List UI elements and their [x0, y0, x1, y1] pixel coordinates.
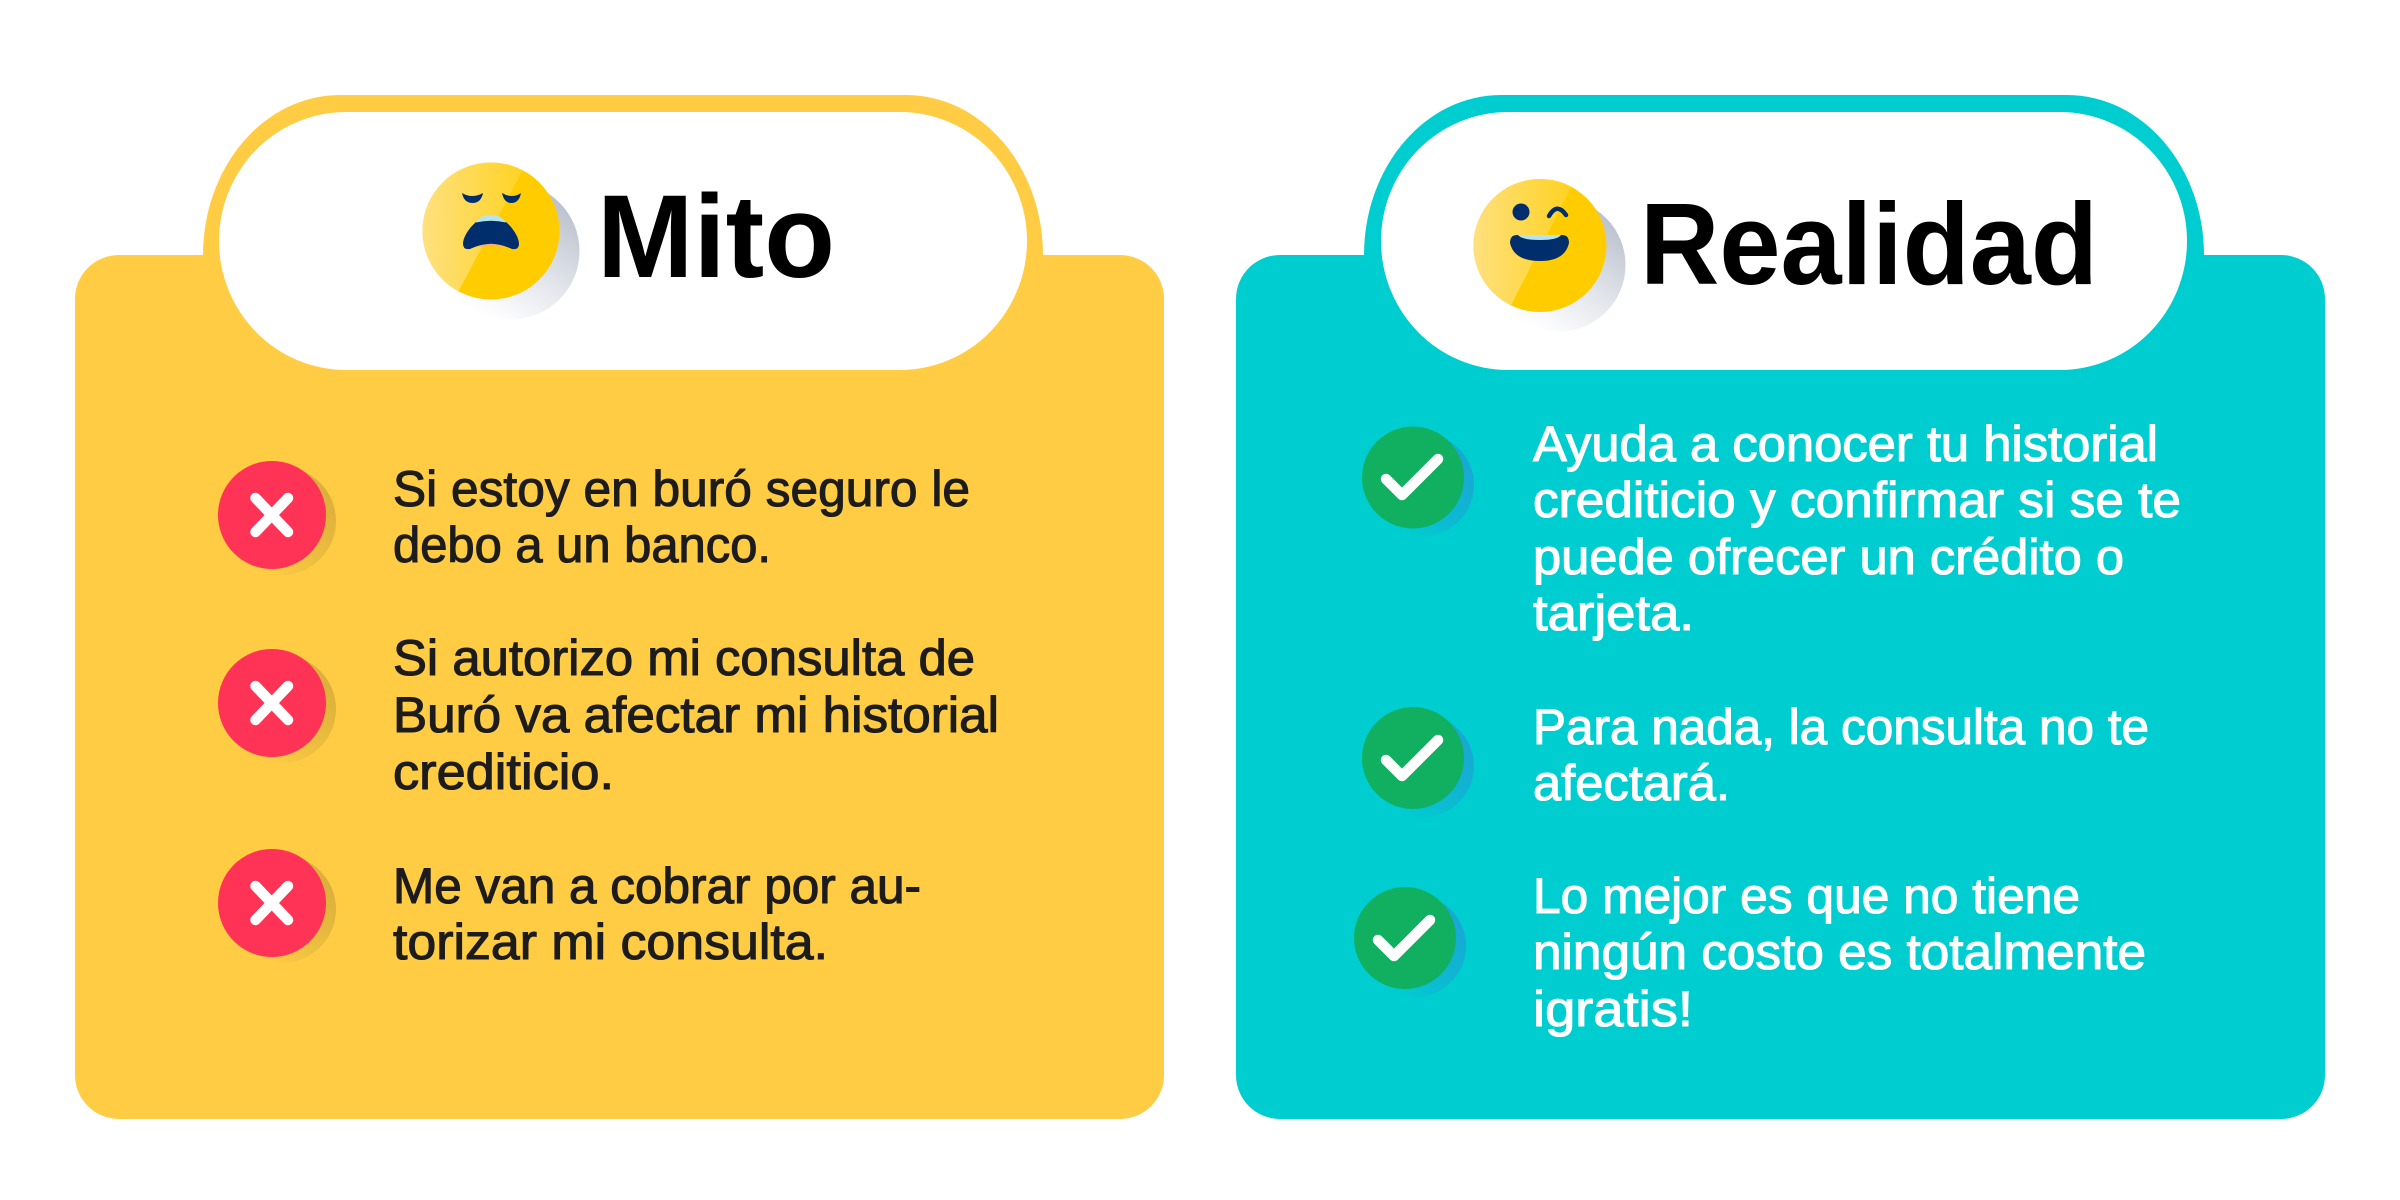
- text: mito 1: debo a un banco.: [393, 517, 771, 573]
- text: realidad 3: [1533, 868, 2146, 1037]
- icon: green check 2: [1362, 707, 1474, 817]
- text: realidad 3: Lo mejor es que no tiene: [1533, 868, 2080, 924]
- text: mito 1: [393, 461, 970, 573]
- heading: Realidad: Realidad: [1640, 179, 2098, 309]
- panel background: Realidad: [1236, 255, 2325, 1119]
- text: mito 3: [393, 858, 921, 970]
- text: realidad 2: afectará.: [1533, 755, 1730, 811]
- text: mito 1: Si estoy en buró seguro le: [393, 461, 970, 517]
- panel: Realidad: [1236, 95, 2325, 1119]
- header tab outline: Mito: [203, 95, 1043, 415]
- text: realidad 2: [1533, 699, 2149, 811]
- text: mito 2: Buró va afectar mi historial: [393, 687, 999, 743]
- icon: red cross 1: [218, 461, 336, 575]
- icon: green check 1: [1362, 426, 1474, 536]
- header pill: Realidad: [1381, 112, 2187, 370]
- text: mito 3: Me van a cobrar por au-: [393, 858, 921, 914]
- text: realidad 1: [1533, 416, 2181, 641]
- panel background: Mito: [75, 255, 1164, 1119]
- text: mito 2: crediticio.: [393, 744, 614, 800]
- header pill: Mito: [219, 112, 1027, 370]
- text: realidad 1: puede ofrecer un crédito o: [1533, 529, 2124, 585]
- text: realidad 1: crediticio y confirmar si se te: [1533, 472, 2181, 528]
- text: realidad 3: igratis!: [1533, 981, 1693, 1037]
- text: realidad 2: Para nada, la consulta no te: [1533, 699, 2149, 755]
- text: mito 2: Si autorizo mi consulta de: [393, 630, 975, 686]
- text: realidad 3: ningún costo es totalmente: [1533, 924, 2146, 980]
- icon: green check 3: [1354, 887, 1466, 997]
- icon: crying face emoji: [422, 162, 580, 318]
- text: mito 3: torizar mi consulta.: [393, 914, 828, 970]
- icon: winking face emoji: [1474, 179, 1626, 330]
- icon: red cross 2: [218, 649, 336, 763]
- text: realidad 1: Ayuda a conocer tu historial: [1533, 416, 2158, 472]
- header tab outline: Realidad: [1364, 95, 2204, 415]
- text: realidad 1: tarjeta.: [1533, 585, 1694, 641]
- text: mito 2: [393, 630, 999, 800]
- heading: Mito: Mito: [597, 171, 835, 303]
- icon: red cross 3: [218, 849, 336, 963]
- panel: Mito: [75, 95, 1164, 1119]
